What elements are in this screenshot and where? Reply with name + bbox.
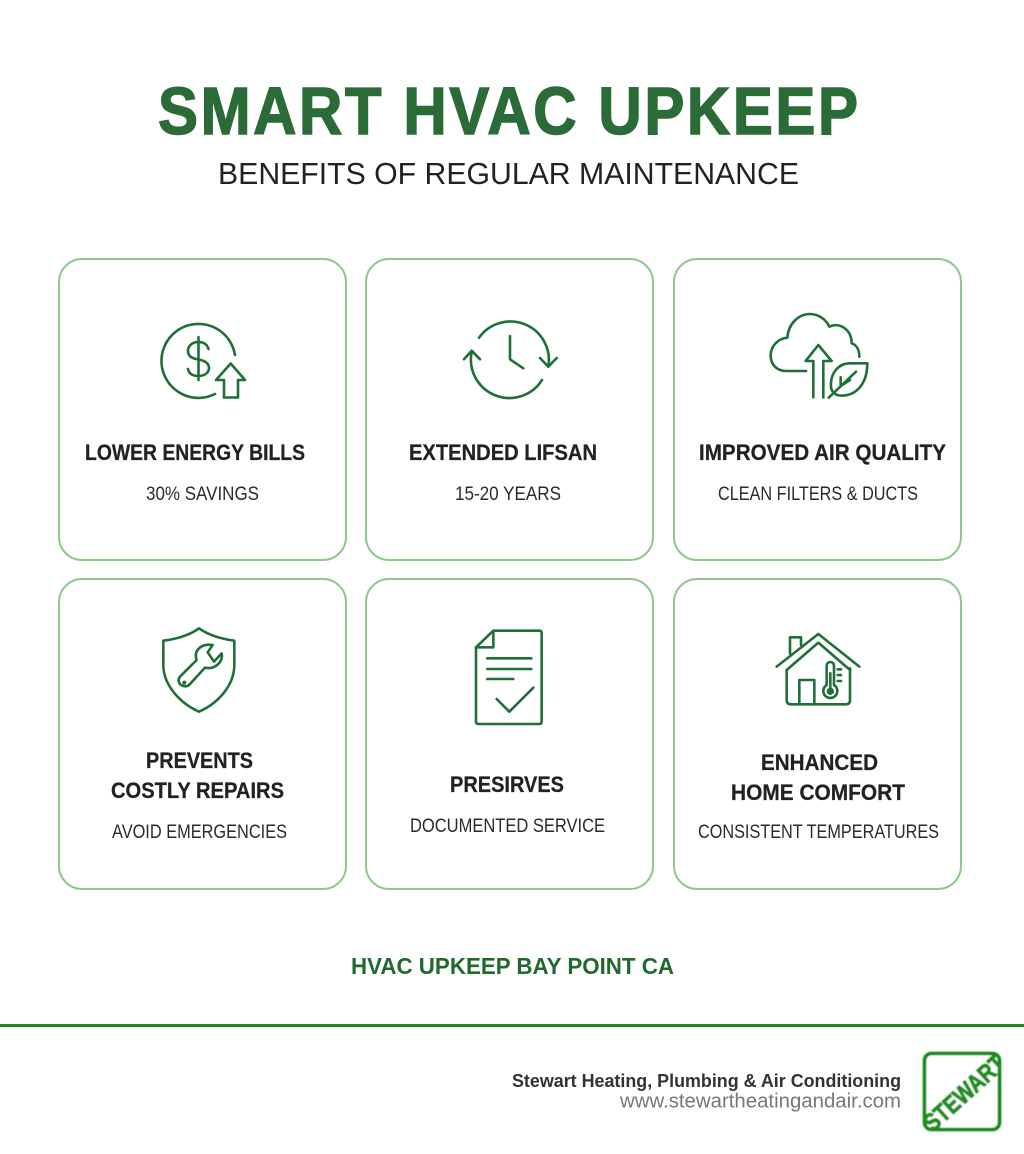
panel: extended lifespan [366, 259, 653, 560]
heading: enhanced home comfort: ENHANCED [761, 750, 878, 775]
heading: presirves: PRESIRVES [450, 772, 564, 797]
subtitle: BENEFITS OF REGULAR MAINTENANCE [218, 156, 799, 191]
text: clean filters and ducts: CLEAN FILTERS & DUCTS [718, 484, 918, 505]
icon: cloud, arrow and leaf [771, 314, 867, 398]
footer: company name: Stewart Heating, Plumbing & Air Conditioning [512, 1071, 901, 1091]
text: consistent temperatures: CONSISTENT TEMPERATURES [698, 822, 939, 843]
footer: website: www.stewartheatingandair.com [619, 1090, 901, 1112]
text: 30% savings: 30% SAVINGS [146, 484, 259, 505]
caption: location: HVAC UPKEEP BAY POINT CA [351, 953, 674, 979]
icon: clock with cycle arrows [464, 321, 557, 398]
heading: extended lifsan: EXTENDED LIFSAN [409, 440, 597, 465]
icon: dollar with up arrow [161, 324, 245, 398]
text: documented service: DOCUMENTED SERVICE [410, 816, 605, 837]
panel: enhanced home comfort [674, 579, 961, 889]
heading: prevents costly repairs [111, 748, 284, 803]
text: avoid emergencies: AVOID EMERGENCIES [112, 822, 287, 843]
panel: improved air quality [674, 259, 961, 560]
icon: document with check [476, 631, 542, 724]
panel: lower energy bills [59, 259, 346, 560]
heading: prevents costly repairs: PREVENTS [146, 748, 253, 773]
logo: stewart [922, 1050, 1002, 1132]
heading: improved air quality: IMPROVED AIR QUALITY [699, 440, 946, 465]
heading: enhanced home comfort: HOME COMFORT [731, 780, 906, 805]
footer rule [0, 1024, 1024, 1027]
heading: enhanced home comfort [731, 750, 906, 805]
icon: house with thermometer [777, 634, 859, 704]
title: SMART HVAC UPKEEP [158, 74, 858, 149]
heading: prevents costly repairs: COSTLY REPAIRS [111, 778, 284, 803]
panel: prevents costly repairs [59, 579, 346, 889]
heading: lower energy bills: LOWER ENERGY BILLS [85, 440, 305, 465]
text: 15-20 years: 15-20 YEARS [455, 484, 561, 505]
icon: shield with wrench [163, 628, 234, 712]
panel: preserves warranty [366, 579, 653, 889]
